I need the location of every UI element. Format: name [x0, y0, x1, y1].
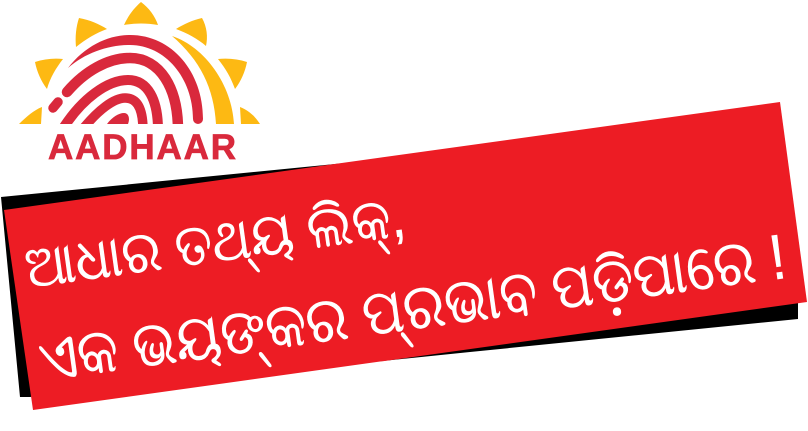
- logo: Aadhaar: [19, 2, 260, 167]
- icon: red fingerprint arcs: [53, 35, 203, 130]
- headline line 1: ଆଧାର ତଥ୍ୟ ଲିକ୍,: [21, 183, 409, 304]
- red banner: [4, 102, 807, 410]
- black banner shadow: [1, 120, 798, 397]
- logo wordmark: AADHAAR: [48, 128, 236, 167]
- icon: yellow sun rays: [19, 2, 260, 124]
- headline line 2: ଏକ ଭୟଙ୍କର ପ୍ରଭାବ ପଡ଼ିପାରେ !: [34, 220, 790, 398]
